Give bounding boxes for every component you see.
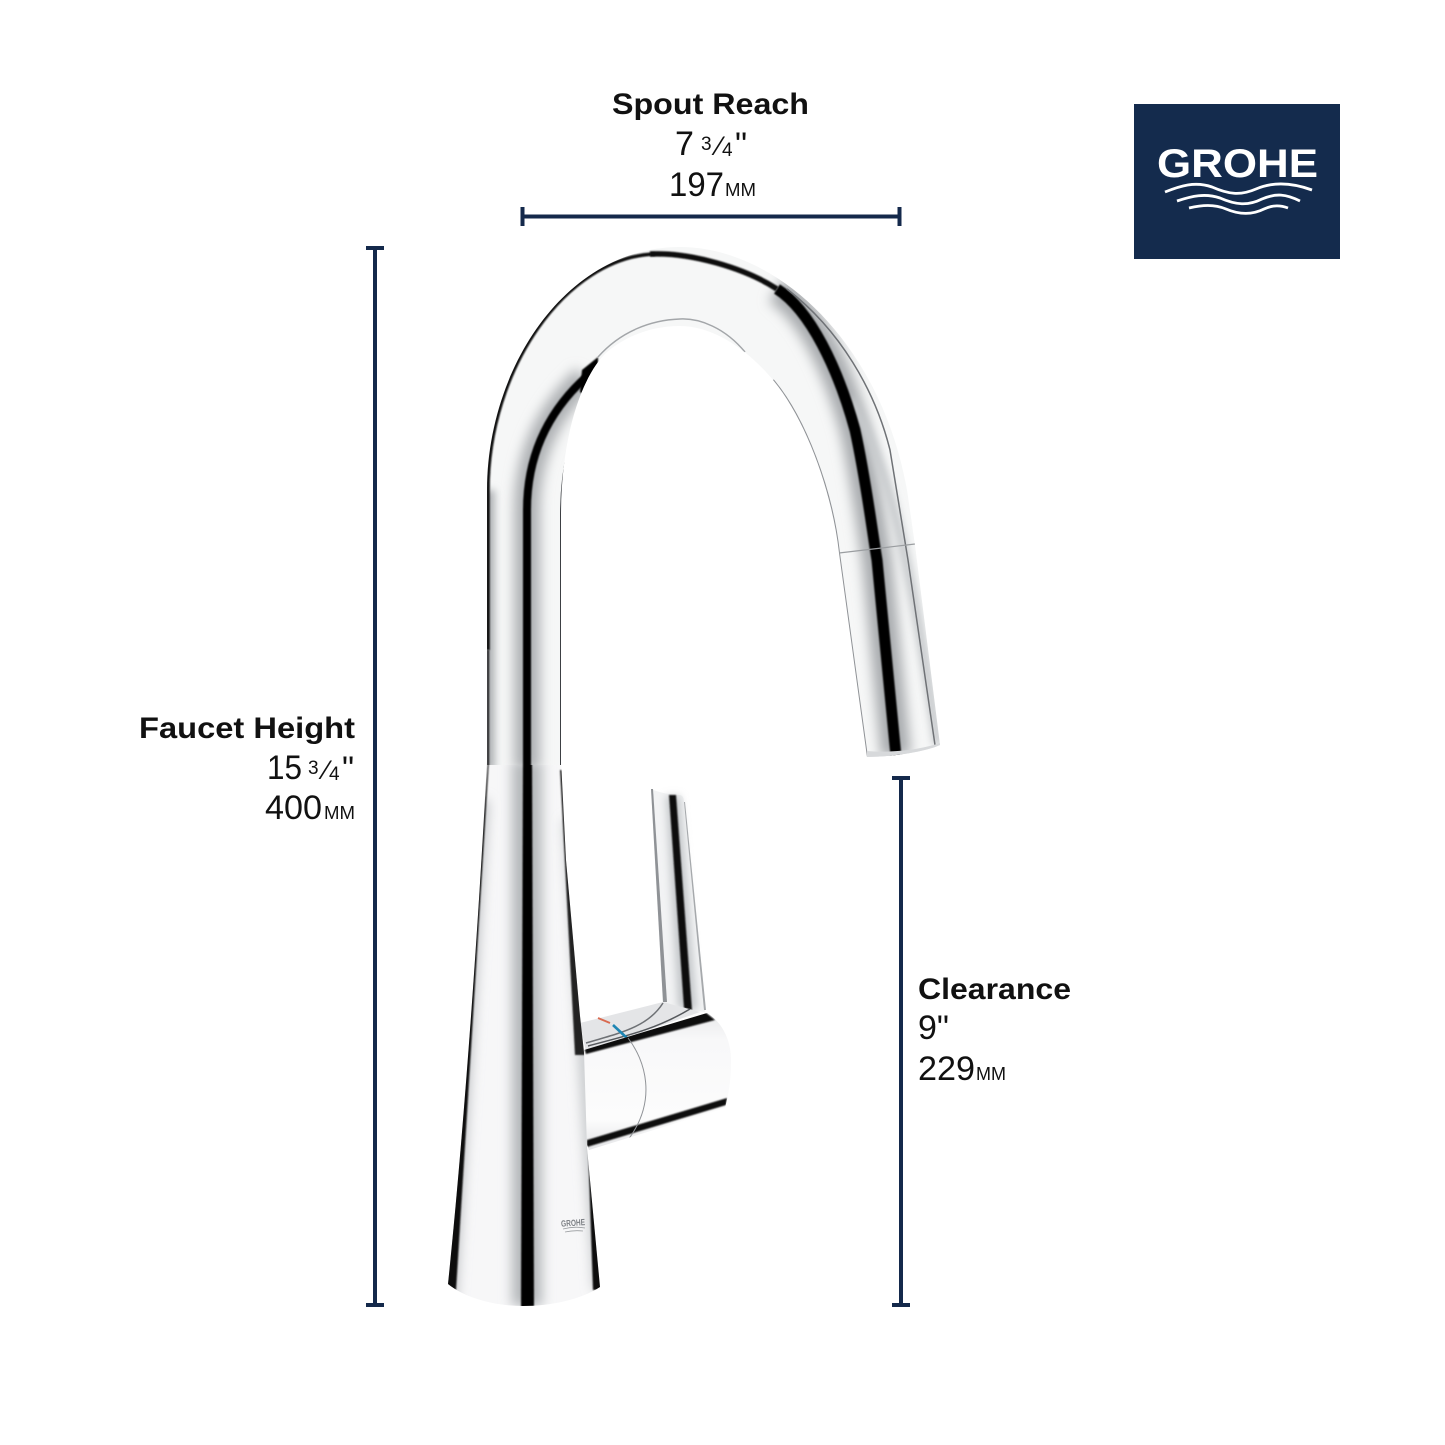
text block: Faucet Height: 15 xyxy=(267,749,302,787)
text block: Faucet Height: ⁄ xyxy=(318,755,333,785)
logo: GROHE badge xyxy=(1134,104,1340,259)
text block: Faucet Height: 400 xyxy=(265,789,322,827)
text block: Faucet Height: Faucet Height xyxy=(139,712,355,745)
lever body xyxy=(584,1013,728,1150)
title: Spout Reach dimension: MM xyxy=(725,180,756,200)
text block: Faucet Height: " xyxy=(342,750,354,788)
title: Spout Reach dimension xyxy=(612,88,809,204)
spout arc xyxy=(480,240,950,770)
dimension line: faucet height xyxy=(366,248,384,1305)
text block: Clearance xyxy=(918,973,1071,1088)
illustration: chrome kitchen faucet xyxy=(445,240,950,1315)
logo: GROHE badge: GROHE xyxy=(1157,142,1318,186)
text block: Clearance: 229 xyxy=(918,1050,975,1088)
title: Spout Reach dimension: ⁄ xyxy=(711,131,726,161)
faucet body xyxy=(445,755,605,1315)
text block: Faucet Height: 3 xyxy=(308,758,319,779)
title: Spout Reach dimension: " xyxy=(735,126,747,164)
dimension line: clearance xyxy=(892,778,910,1305)
title: Spout Reach dimension: 7 xyxy=(675,125,694,163)
text block: Faucet Height: MM xyxy=(324,803,355,823)
text block: Clearance: Clearance xyxy=(918,973,1071,1006)
text block: Faucet Height xyxy=(139,712,355,827)
handle lever xyxy=(651,789,706,1012)
title: Spout Reach dimension: 3 xyxy=(701,134,712,155)
title: Spout Reach dimension: Spout Reach xyxy=(612,88,809,121)
dimension line: spout reach xyxy=(522,207,900,226)
text block: Clearance: MM xyxy=(976,1064,1006,1084)
brand mark on body xyxy=(561,1217,585,1232)
title: Spout Reach dimension: 197 xyxy=(669,166,724,204)
title: Spout Reach dimension: 4 xyxy=(722,140,733,161)
text block: Clearance: 9" xyxy=(918,1009,949,1047)
text block: Faucet Height: 4 xyxy=(329,764,340,785)
handle collar with hot and cold marks xyxy=(580,1002,700,1052)
brand mark on body: GROHE xyxy=(561,1217,585,1229)
